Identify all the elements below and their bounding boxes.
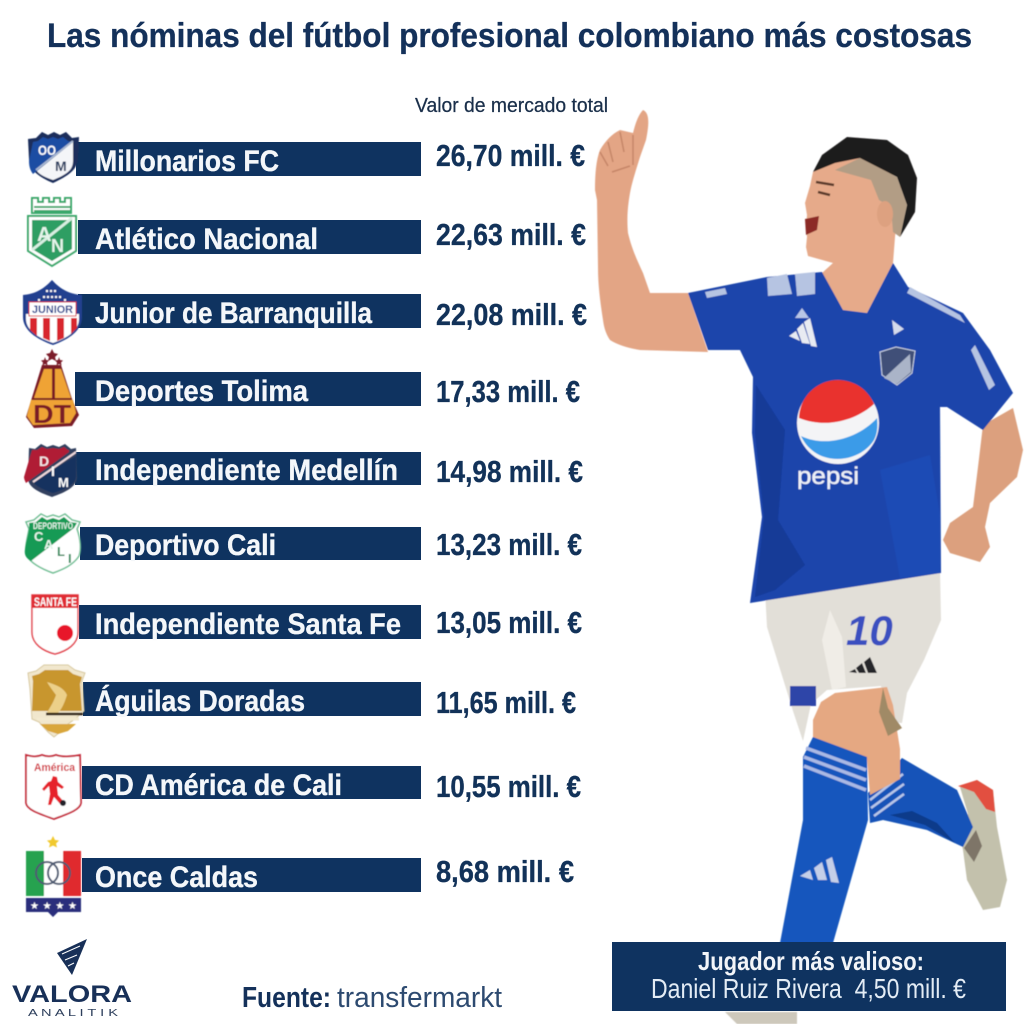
row: Atlético Nacional — [28, 198, 586, 266]
row: Independiente Medellín — [24, 444, 583, 497]
pepsi globe — [797, 380, 879, 490]
player: shorts: 10 — [846, 607, 893, 654]
logo: Valora Analitik — [12, 939, 132, 1019]
row: Once Caldas — [26, 836, 574, 917]
row: Deportivo Cali: Deportivo Cali — [95, 529, 276, 562]
row: Deportivo Cali — [25, 514, 582, 573]
row: Deportes Tolima — [26, 349, 580, 429]
row: Independiente Medellín: 14,98 mill. € — [436, 454, 583, 489]
player: front sock — [780, 737, 868, 943]
row: Deportivo Cali: L — [57, 544, 65, 559]
title: Las nóminas del fútbol profesional colombiano más costosas — [47, 17, 972, 55]
row: Junior de Barranquilla: 22,08 mill. € — [436, 297, 587, 332]
row: Independiente Medellín: M — [58, 475, 69, 490]
player: thigh — [813, 687, 900, 795]
row: Águilas Doradas: Águilas Doradas — [95, 684, 305, 718]
logo: Valora Analitik: VALORA — [12, 981, 132, 1008]
callout: most valuable player: Daniel Ruiz Rivera 4,50 mill. € — [651, 973, 966, 1004]
row: Millonarios FC: M — [55, 158, 67, 174]
row: Deportes Tolima: DT — [33, 399, 71, 429]
player: lower boot stub — [725, 1012, 797, 1024]
player: mouth — [805, 216, 819, 235]
row: Deportivo Cali: I — [68, 551, 72, 566]
jersey: crest — [880, 320, 915, 385]
callout: most valuable player — [612, 942, 1006, 1011]
row: Independiente Medellín: Independiente Medellín — [95, 454, 398, 487]
sock: adidas mark — [800, 857, 839, 883]
player: finger creases — [600, 132, 633, 172]
player: raised arm — [595, 110, 708, 352]
row: Atlético Nacional: Atlético Nacional — [95, 223, 318, 256]
row: Deportes Tolima: 17,33 mill. € — [436, 374, 580, 409]
jersey: shoulder stripes — [705, 272, 995, 390]
row: Millonarios FC: 26,70 mill. € — [436, 138, 585, 173]
row: Junior de Barranquilla — [23, 280, 587, 345]
row: Deportivo Cali: DEPORTIVO — [33, 521, 73, 531]
row: Once Caldas: 8,68 mill. € — [436, 854, 574, 889]
player: brow and eye — [816, 182, 834, 195]
row: Independiente Santa Fe: Independiente Santa Fe — [95, 608, 401, 641]
row: Independiente Santa Fe: SANTA FE — [34, 597, 77, 609]
row: CD América de Cali: CD América de Cali — [95, 769, 342, 802]
pepsi globe: pepsi — [797, 463, 859, 490]
source line: Fuente: — [242, 982, 331, 1014]
row: Atlético Nacional: N — [51, 236, 64, 256]
callout: most valuable player: Jugador más valioso: — [698, 946, 924, 976]
source line — [242, 982, 502, 1014]
row: Deportivo Cali: C — [34, 529, 44, 544]
row: Atlético Nacional: A — [37, 224, 51, 246]
row: Once Caldas: Once Caldas — [95, 861, 258, 894]
row: CD América de Cali: 10,55 mill. € — [436, 769, 581, 804]
row: Independiente Medellín: D — [39, 453, 49, 469]
row: Junior de Barranquilla: Junior de Barranquilla — [95, 297, 372, 330]
player: right arm — [943, 408, 1023, 562]
player: neck and face — [805, 147, 901, 313]
row: Deportivo Cali: A — [44, 537, 54, 552]
logo: Valora Analitik: A N A L I T I K — [28, 1008, 118, 1019]
row: Independiente Santa Fe — [32, 595, 582, 654]
player: back boot — [958, 780, 1007, 910]
row: Millonarios FC — [28, 132, 585, 183]
player: back sock — [868, 758, 973, 847]
shorts: adidas mark — [849, 657, 877, 673]
row: Independiente Santa Fe: 13,05 mill. € — [436, 605, 582, 640]
player: shorts tag — [879, 688, 902, 736]
row: Águilas Doradas — [28, 665, 576, 737]
row: CD América de Cali: América — [34, 762, 76, 774]
row: Deportivo Cali: 13,23 mill. € — [436, 527, 582, 562]
row: Junior de Barranquilla: JUNIOR — [32, 304, 73, 316]
row: Independiente Medellín: I — [51, 463, 55, 479]
row: Atlético Nacional: 22,63 mill. € — [436, 217, 586, 252]
player: jersey — [688, 263, 1013, 603]
row: Once Caldas: ★★★★ — [30, 901, 77, 912]
row: Millonarios FC: Millonarios FC — [95, 145, 279, 178]
player: shorts — [765, 570, 941, 741]
source line: transfermarkt — [337, 982, 502, 1014]
row: Águilas Doradas: 11,65 mill. € — [436, 685, 576, 720]
player: hair — [813, 137, 917, 237]
row: Millonarios FC: OO — [38, 142, 56, 158]
player: ear — [877, 201, 893, 227]
column header: Valor de mercado total — [415, 95, 608, 117]
row: CD América de Cali — [26, 755, 581, 819]
player illustration — [595, 110, 1023, 1024]
row: Deportes Tolima: Deportes Tolima — [95, 375, 308, 408]
jersey: adidas mark — [789, 318, 817, 347]
